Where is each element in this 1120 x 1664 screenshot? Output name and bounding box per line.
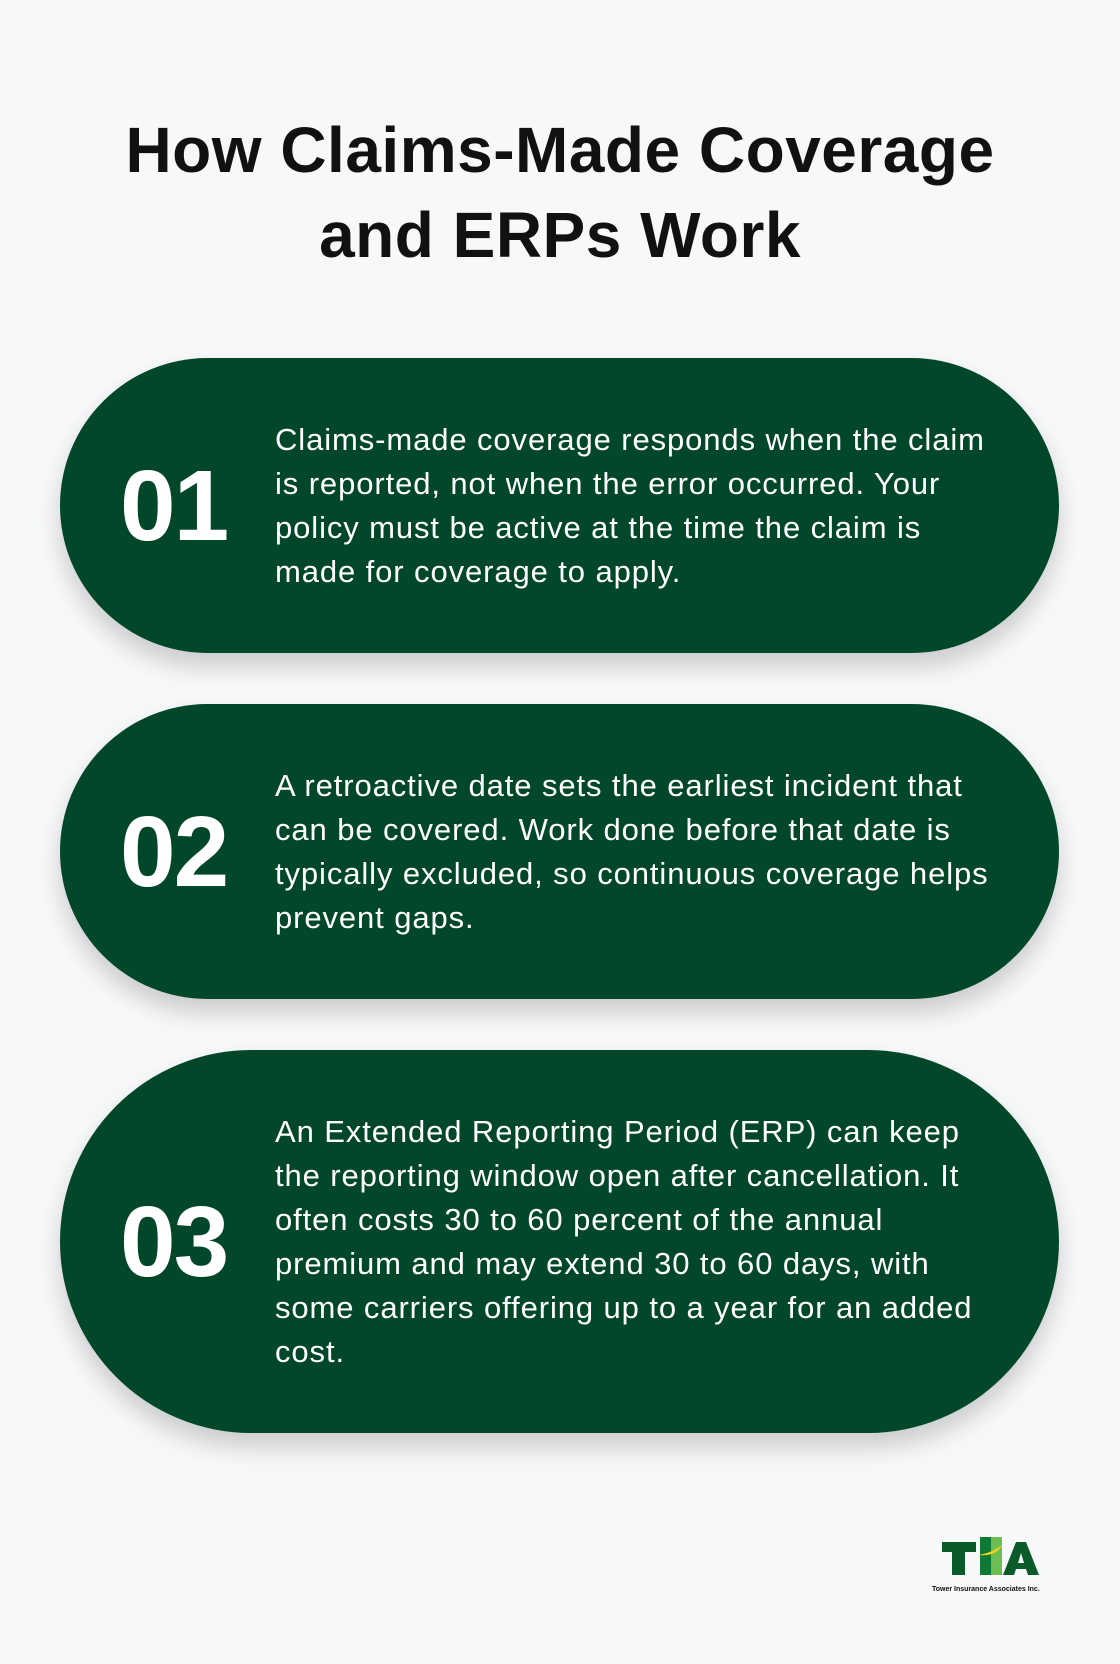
panel: 01 xyxy=(60,358,1059,653)
text 02: prevent gaps. xyxy=(275,900,475,934)
text 01: made for coverage to apply. xyxy=(275,554,681,588)
text 02: can be covered. Work done before that date is xyxy=(275,812,951,846)
text 01 xyxy=(275,422,985,588)
panel: 02 xyxy=(60,704,1059,999)
title xyxy=(125,114,995,271)
number 03: 03 xyxy=(120,1186,227,1298)
text 03: often costs 30 to 60 percent of the annual xyxy=(275,1202,883,1236)
number 02: 02 xyxy=(120,796,227,908)
text 01: policy must be active at the time the claim is xyxy=(275,510,921,544)
number 01: 01 xyxy=(120,450,227,562)
text 02: A retroactive date sets the earliest incident that xyxy=(275,768,963,802)
title: and ERPs Work xyxy=(319,199,801,271)
text 03 xyxy=(275,1114,972,1368)
text 02 xyxy=(275,768,989,934)
panel: 03 xyxy=(60,1050,1059,1433)
text 01: is reported, not when the error occurred. Your xyxy=(275,466,940,500)
text 01: Claims-made coverage responds when the claim xyxy=(275,422,985,456)
text 03: premium and may extend 30 to 60 days, with xyxy=(275,1246,930,1280)
title: How Claims-Made Coverage xyxy=(125,114,995,186)
logo: Tower Insurance Associates Inc. xyxy=(932,1586,1040,1593)
text 03: cost. xyxy=(275,1334,345,1368)
text 03: An Extended Reporting Period (ERP) can keep xyxy=(275,1114,960,1148)
text 02: typically excluded, so continuous coverage helps xyxy=(275,856,989,890)
logo xyxy=(932,1537,1040,1593)
text 03: the reporting window open after cancellation. It xyxy=(275,1158,959,1192)
text 03: some carriers offering up to a year for an added xyxy=(275,1290,972,1324)
